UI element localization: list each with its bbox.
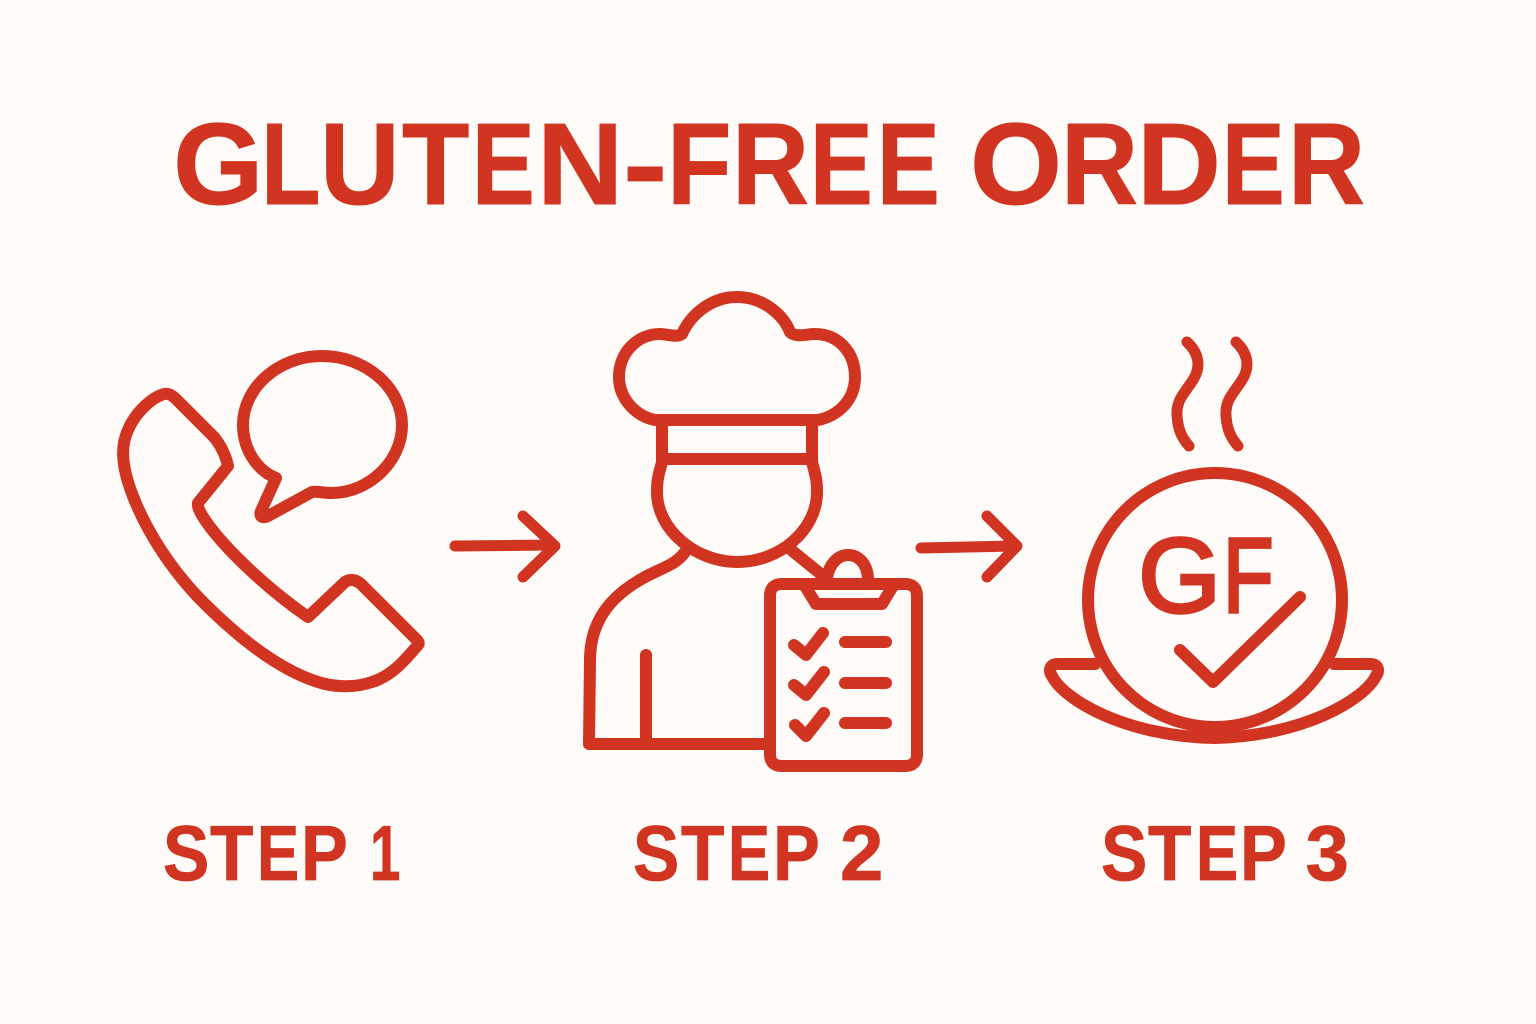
title: D bbox=[1137, 99, 1221, 229]
arrow: step 2 to step 3 bbox=[921, 516, 1017, 577]
label: step 3 bbox=[1101, 808, 1349, 896]
label: step 3: P bbox=[1240, 808, 1286, 896]
steam bbox=[1177, 342, 1247, 446]
title: L bbox=[261, 99, 321, 229]
title: G bbox=[173, 99, 263, 229]
label: step 1: S bbox=[162, 808, 209, 896]
label: step 3: 3 bbox=[1306, 808, 1349, 896]
body bbox=[589, 549, 822, 744]
GF label bbox=[1138, 516, 1273, 634]
title: F bbox=[667, 99, 731, 229]
icon: phone with speech bubble bbox=[123, 356, 419, 686]
label: step 2: T bbox=[681, 808, 725, 896]
head bbox=[657, 462, 817, 562]
title: E bbox=[877, 99, 940, 229]
clipboard bbox=[770, 584, 917, 766]
label: step 2: E bbox=[728, 808, 770, 896]
check mark bbox=[1180, 597, 1300, 682]
title: T bbox=[402, 99, 469, 229]
title: - bbox=[623, 99, 667, 229]
clipboard clip bbox=[805, 555, 893, 604]
title: O bbox=[970, 99, 1062, 229]
label: step 3: T bbox=[1148, 808, 1192, 896]
title: E bbox=[1222, 99, 1284, 229]
plate bbox=[1050, 664, 1378, 738]
speech bubble bbox=[243, 356, 402, 517]
label: step 1 bbox=[162, 808, 400, 896]
label: step 1: T bbox=[210, 808, 254, 896]
title: U bbox=[320, 99, 400, 229]
label: step 2: S bbox=[633, 808, 679, 896]
title: R bbox=[732, 99, 809, 229]
chef hat bbox=[619, 297, 855, 420]
arrow: step 1 to step 2 bbox=[455, 516, 555, 577]
label: step 3: S bbox=[1101, 808, 1147, 896]
title: R bbox=[1061, 99, 1138, 229]
title: E bbox=[810, 99, 872, 229]
icon: gluten-free dish bbox=[1050, 342, 1378, 738]
icon: chef with clipboard bbox=[589, 297, 917, 766]
label: step 2: 2 bbox=[840, 808, 883, 896]
dish circle bbox=[1088, 473, 1342, 727]
label: step 1: P bbox=[301, 808, 348, 896]
checklist bbox=[794, 633, 886, 736]
title: E bbox=[472, 99, 535, 229]
title: R bbox=[1288, 99, 1365, 229]
hat band bbox=[662, 420, 812, 460]
GF label: F bbox=[1223, 516, 1273, 634]
label: step 2 bbox=[633, 808, 883, 896]
label: step 1: 1 bbox=[370, 808, 400, 896]
label: step 3: E bbox=[1196, 808, 1238, 896]
GF label: G bbox=[1138, 516, 1221, 634]
label: step 2: P bbox=[773, 808, 819, 896]
label: step 1: E bbox=[257, 808, 299, 896]
title bbox=[173, 99, 1365, 229]
title: N bbox=[537, 99, 623, 229]
phone handset bbox=[123, 394, 419, 686]
